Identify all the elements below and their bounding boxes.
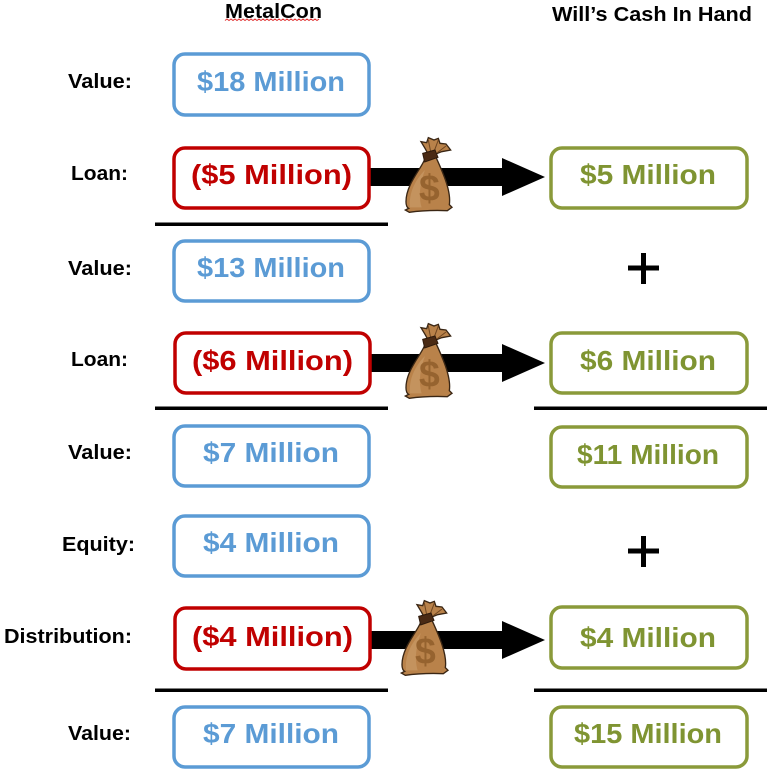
plus sign 2	[628, 536, 659, 567]
MetalCon: $4 Million equity: $4 Million	[203, 527, 339, 558]
MetalCon: final $7 Million	[174, 707, 369, 767]
label: Value: Value:	[68, 442, 132, 464]
row labels	[4, 71, 135, 745]
Cash: $6 Million: $6 Million	[580, 345, 716, 376]
label: Value: Value:	[68, 258, 132, 280]
plus sign 1	[628, 253, 659, 284]
arrow 2	[370, 344, 545, 382]
MetalCon: ($5 Million): ($5 Million)	[191, 159, 352, 190]
Cash: $11 Million	[551, 427, 747, 487]
MetalCon: $7 Million	[174, 426, 369, 486]
MetalCon: $7 Million: $7 Million	[203, 437, 339, 468]
Cash: $15 Million	[551, 707, 747, 767]
label: Loan: Loan:	[71, 163, 128, 185]
MetalCon: ($6 Million): ($6 Million)	[192, 345, 353, 376]
MetalCon: final $7 Million: $7 Million	[203, 718, 339, 749]
arrow 3	[370, 621, 545, 659]
Cash: $11 Million: $11 Million	[577, 439, 719, 470]
arrow 1	[370, 158, 545, 196]
MetalCon: ($4 Million): ($4 Million)	[192, 621, 353, 652]
MetalCon: $13 Million: $13 Million	[197, 252, 345, 283]
MetalCon: ($4 Million)	[175, 608, 370, 669]
icon: money bag 1	[405, 138, 452, 212]
label: Loan: Loan:	[71, 349, 128, 371]
MetalCon: $18 Million: $18 Million	[197, 66, 345, 97]
Cash: $6 Million	[551, 333, 747, 393]
Cash: $15 Million: $15 Million	[574, 718, 722, 749]
Cash: $5 Million: $5 Million	[580, 159, 716, 190]
MetalCon: $4 Million equity	[174, 516, 369, 576]
label: Equity: Equity:	[62, 534, 135, 556]
label: Value: Value:	[68, 71, 132, 93]
Cash: $4 Million	[551, 607, 747, 668]
label: Distribution: Distribution:	[4, 626, 132, 648]
MetalCon: ($6 Million)	[175, 333, 370, 393]
heading: MetalCon: MetalCon	[225, 1, 322, 23]
MetalCon: $18 Million	[174, 54, 369, 115]
Cash: $5 Million	[551, 148, 747, 208]
label: Value: Value:	[68, 723, 131, 745]
MetalCon: ($5 Million)	[174, 148, 369, 208]
icon: money bag 3	[401, 601, 448, 675]
heading: Will's Cash In Hand: Will’s Cash In Hand	[552, 4, 752, 26]
icon: money bag 2	[405, 324, 452, 398]
MetalCon: $13 Million	[174, 241, 369, 301]
Cash: $4 Million: $4 Million	[580, 622, 716, 653]
